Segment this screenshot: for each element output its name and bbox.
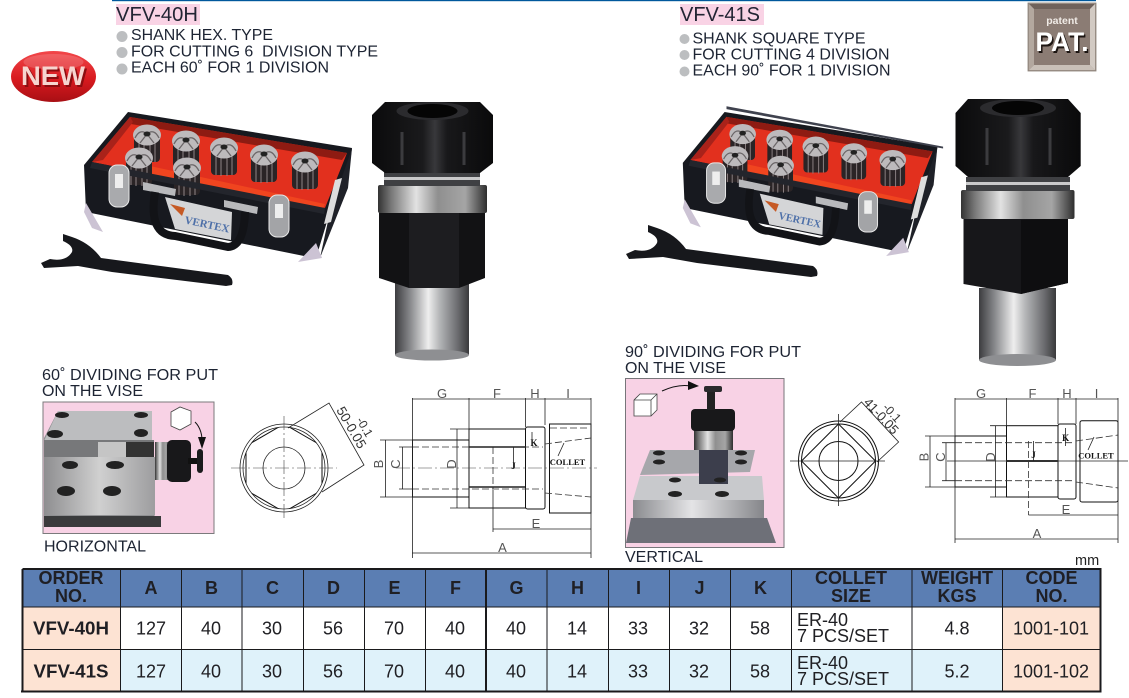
photo: vertical vise: [626, 378, 784, 548]
header row: B: [205, 578, 218, 598]
handle: [154, 192, 245, 247]
row: VFV-41S: 5.2: [944, 662, 970, 682]
row: VFV-41S: 14: [567, 662, 587, 682]
row: VFV-41S: 40: [445, 662, 465, 682]
drawing: VFV-40H side view: A: [498, 540, 507, 555]
header row: ORDER: [38, 568, 104, 588]
header row: F: [450, 578, 461, 598]
row: VFV-40H: 40: [201, 618, 221, 638]
unit label: mm: [1075, 553, 1099, 569]
row: VFV-41S: 40: [201, 662, 221, 682]
icon: NEW badge: [11, 51, 96, 102]
drawing: hexagon end view: [231, 403, 376, 518]
row: VFV-40H: 33: [628, 618, 648, 638]
header row: NO.: [1035, 586, 1068, 606]
row: VFV-40H: 32: [689, 618, 709, 638]
drawing: square end view: [790, 395, 904, 506]
icon: wrench VFV-40H: [41, 234, 232, 286]
header row: A: [144, 578, 158, 598]
feature list: VFV-41S: [680, 30, 890, 80]
drawing: VFV-41S side view: A: [1033, 526, 1042, 541]
drawing: VFV-41S side view: B: [916, 453, 932, 461]
header row: H: [571, 578, 584, 598]
caption: horizontal: HORIZONTAL: [44, 538, 146, 556]
row: VFV-40H: VFV-40H: [33, 618, 109, 638]
row: VFV-41S: 127: [136, 662, 166, 682]
table grid: [22, 569, 1101, 692]
feature list: VFV-41S: EACH 90˚ FOR 1 DIVISION: [692, 62, 890, 80]
row: VFV-40H: 70: [384, 618, 404, 638]
drawing: VFV-40H side view: B: [371, 460, 386, 468]
photo: tool holder VFV-41S: [956, 99, 1081, 366]
photo: case with collets VFV-41S: [683, 106, 943, 256]
drawing: VFV-41S side view: [916, 386, 1128, 543]
row: VFV-41S: ER-40: [797, 653, 848, 673]
drawing: VFV-41S side view: C: [933, 452, 948, 462]
row: VFV-41S: 33: [628, 662, 648, 682]
drawing: VFV-40H side view: I: [566, 386, 570, 401]
row: VFV-41S: 1001-102: [1013, 662, 1089, 682]
drawing: square end view: -0.1: [880, 400, 904, 425]
icon: NEW badge: NEW: [21, 61, 86, 91]
feature list: VFV-40H: [116, 27, 378, 76]
row: VFV-41S: 40: [506, 662, 526, 682]
drawing: VFV-40H side view: COLLET: [550, 457, 586, 467]
feature list: VFV-40H: FOR CUTTING 6 DIVISION TYPE: [131, 44, 378, 60]
drawing: square end view: 41-0.05: [861, 395, 902, 437]
row: VFV-40H: 127: [136, 618, 166, 638]
header row: KGS: [937, 586, 977, 606]
row: VFV-40H: 1001-101: [1013, 618, 1089, 638]
drawing: VFV-41S side view: D: [983, 452, 998, 462]
caption: 90 degree dividing: 90˚ DIVIDING FOR PUT: [625, 344, 802, 361]
header row: K: [754, 578, 767, 598]
feature list: VFV-40H: SHANK HEX. TYPE: [131, 27, 273, 44]
header row: SIZE: [831, 586, 871, 606]
row: VFV-40H: 7 PCS/SET: [797, 626, 889, 646]
caption: 90 degree dividing: [625, 344, 802, 377]
header row: WEIGHT: [921, 568, 993, 588]
drawing: VFV-41S side view: COLLET: [1078, 450, 1114, 460]
drawing: VFV-40H side view: C: [388, 459, 403, 469]
row: VFV-40H: 56: [323, 618, 343, 638]
corners: [84, 203, 103, 232]
drawing: VFV-40H side view: K: [530, 438, 538, 448]
drawing: VFV-41S side view: K: [1062, 433, 1069, 443]
row: VFV-40H: 14: [567, 618, 587, 638]
drawing: VFV-40H side view: F: [493, 386, 501, 401]
icon: NEW badge: NEW: [23, 63, 88, 93]
drawing: VFV-40H side view: D: [444, 459, 459, 469]
drawing: VFV-40H side view: H: [530, 386, 540, 401]
drawing: VFV-41S side view: I: [1095, 386, 1098, 401]
row: VFV-41S: 7 PCS/SET: [797, 669, 889, 689]
header row: C: [266, 578, 279, 598]
caption: 90 degree dividing: ON THE VISE: [625, 360, 726, 377]
photo: case with collets VFV-41S: VERTEX: [777, 211, 822, 231]
header row: D: [327, 578, 340, 598]
row: VFV-40H: 4.8: [944, 618, 970, 638]
row: VFV-41S: 58: [750, 662, 770, 682]
caption: vertical: VERTICAL: [625, 549, 703, 566]
row: VFV-41S: 70: [384, 662, 404, 682]
row: VFV-40H: 40: [506, 618, 526, 638]
latches: [109, 165, 129, 207]
top rule: [112, 0, 1096, 1]
caption: 60 degree dividing: 60˚ DIVIDING FOR PUT: [42, 367, 219, 384]
heading: VFV-41S: VFV-41S: [680, 4, 760, 26]
drawing: hexagon end view: 50-0.05: [333, 404, 369, 451]
drawing: VFV-40H side view: G: [437, 386, 447, 401]
header row: E: [388, 578, 401, 598]
drawing: VFV-40H side view: E: [532, 516, 541, 531]
feature list: VFV-41S: SHANK SQUARE TYPE: [692, 30, 866, 48]
row: VFV-41S: [34, 653, 1089, 689]
header row: [38, 568, 1078, 606]
header row: CODE: [1025, 568, 1078, 588]
table outline: [21, 569, 1100, 692]
row: VFV-40H: [33, 610, 1089, 646]
drawing: VFV-41S side view: G: [976, 386, 986, 401]
header row: COLLET: [815, 568, 887, 588]
row: VFV-41S: VFV-41S: [34, 662, 108, 682]
row: VFV-41S: 32: [689, 662, 709, 682]
drawing: VFV-41S side view: E: [1062, 502, 1071, 517]
heading: VFV-40H: VFV-40H: [116, 4, 198, 26]
row: VFV-40H: 58: [750, 618, 770, 638]
photo: tool holder VFV-40H: [372, 102, 493, 360]
feature list: VFV-40H: EACH 60˚ FOR 1 DIVISION: [131, 60, 329, 76]
header row: J: [694, 578, 705, 598]
caption: 60 degree dividing: ON THE VISE: [42, 383, 143, 400]
caption: 60 degree dividing: [42, 367, 219, 400]
icon: patent badge: patent: [1046, 15, 1078, 27]
row: VFV-40H: ER-40: [797, 610, 848, 630]
table fills: [22, 569, 1101, 692]
photo: case with collets VFV-40H: [84, 112, 352, 262]
icon: patent badge: [1028, 3, 1096, 71]
row: VFV-41S: 56: [323, 662, 343, 682]
photo: horizontal vise: [43, 402, 214, 534]
row: VFV-40H: 30: [262, 618, 282, 638]
drawing: VFV-40H side view: [371, 386, 597, 558]
row: VFV-40H: 40: [445, 618, 465, 638]
drawing: VFV-41S side view: F: [1029, 386, 1037, 401]
photo: case with collets VFV-40H: VERTEX: [184, 214, 231, 236]
feature list: VFV-41S: FOR CUTTING 4 DIVISION: [692, 46, 890, 64]
header row: G: [509, 578, 524, 598]
table: specifications: [21, 568, 1101, 692]
icon: wrench VFV-41S: [626, 225, 818, 277]
row: VFV-41S: 30: [262, 662, 282, 682]
header row: NO.: [55, 586, 87, 606]
drawing: VFV-41S side view: J: [1031, 450, 1036, 460]
drawing: hexagon end view: -0.1: [353, 414, 376, 440]
icon: patent badge: PAT.: [1036, 27, 1088, 57]
icon: patent badge: PAT.: [1037, 29, 1090, 59]
drawing: VFV-40H side view: J: [511, 461, 516, 471]
drawing: VFV-41S side view: H: [1062, 386, 1072, 401]
header row: I: [636, 578, 641, 598]
